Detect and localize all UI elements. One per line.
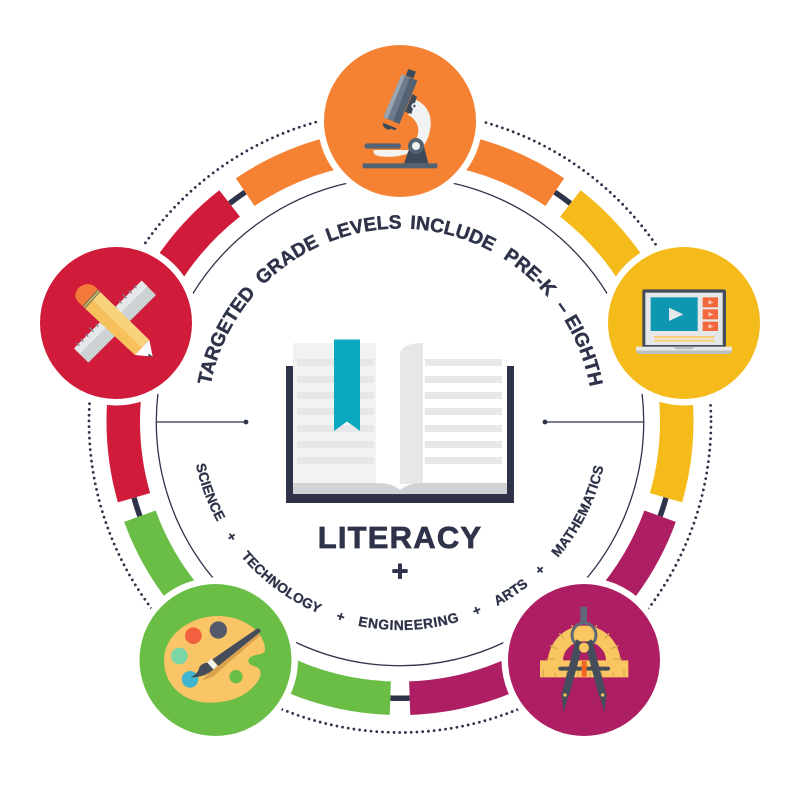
heading: targeted grade levels: EIGHTH [564,314,603,386]
subject list: science technology engineering arts mathematics: + [473,606,480,614]
node: arts paint palette [133,578,298,742]
subject list: science technology engineering arts mathematics: MATHEMATICS [550,466,603,558]
thin inner ring [156,183,644,666]
subject list: science technology engineering arts mathematics: + [536,566,544,573]
subject list: science technology engineering arts mathematics: SCIENCE [196,464,226,522]
title: literacy: LITERACY [318,520,482,555]
icon: open book [286,340,514,503]
subject list: science technology engineering arts mathematics: ENGINEERING [358,613,458,630]
heading: targeted grade levels: GRADE [256,234,320,283]
heading: targeted grade levels: PRE-K [504,248,558,298]
dotted outer ring [89,110,711,732]
dark links between band segments [134,192,666,698]
subject list: science technology engineering arts mathematics: + [228,533,236,540]
subject list: science technology engineering arts mathematics: + [337,612,344,620]
node: science microscope [318,38,482,204]
heading: targeted grade levels [197,215,603,386]
plus sign: + [392,556,408,588]
node: engineering compass and protractor [502,578,666,742]
connector lines pointing to the book [157,420,643,424]
subject list: science technology engineering arts mathematics [196,464,603,630]
subject list: science technology engineering arts mathematics: ARTS [496,579,528,606]
heading: targeted grade levels: LEVELS [325,215,402,242]
coloured ring bands [123,145,677,698]
subject list: science technology engineering arts mathematics: TECHNOLOGY [242,550,322,612]
heading: targeted grade levels: INCLUDE [411,215,497,252]
node: mathematics pencil and ruler [34,240,198,406]
node: technology laptop [602,240,766,406]
heading: targeted grade levels: – [558,302,566,312]
heading: targeted grade levels: TARGETED [197,287,254,384]
